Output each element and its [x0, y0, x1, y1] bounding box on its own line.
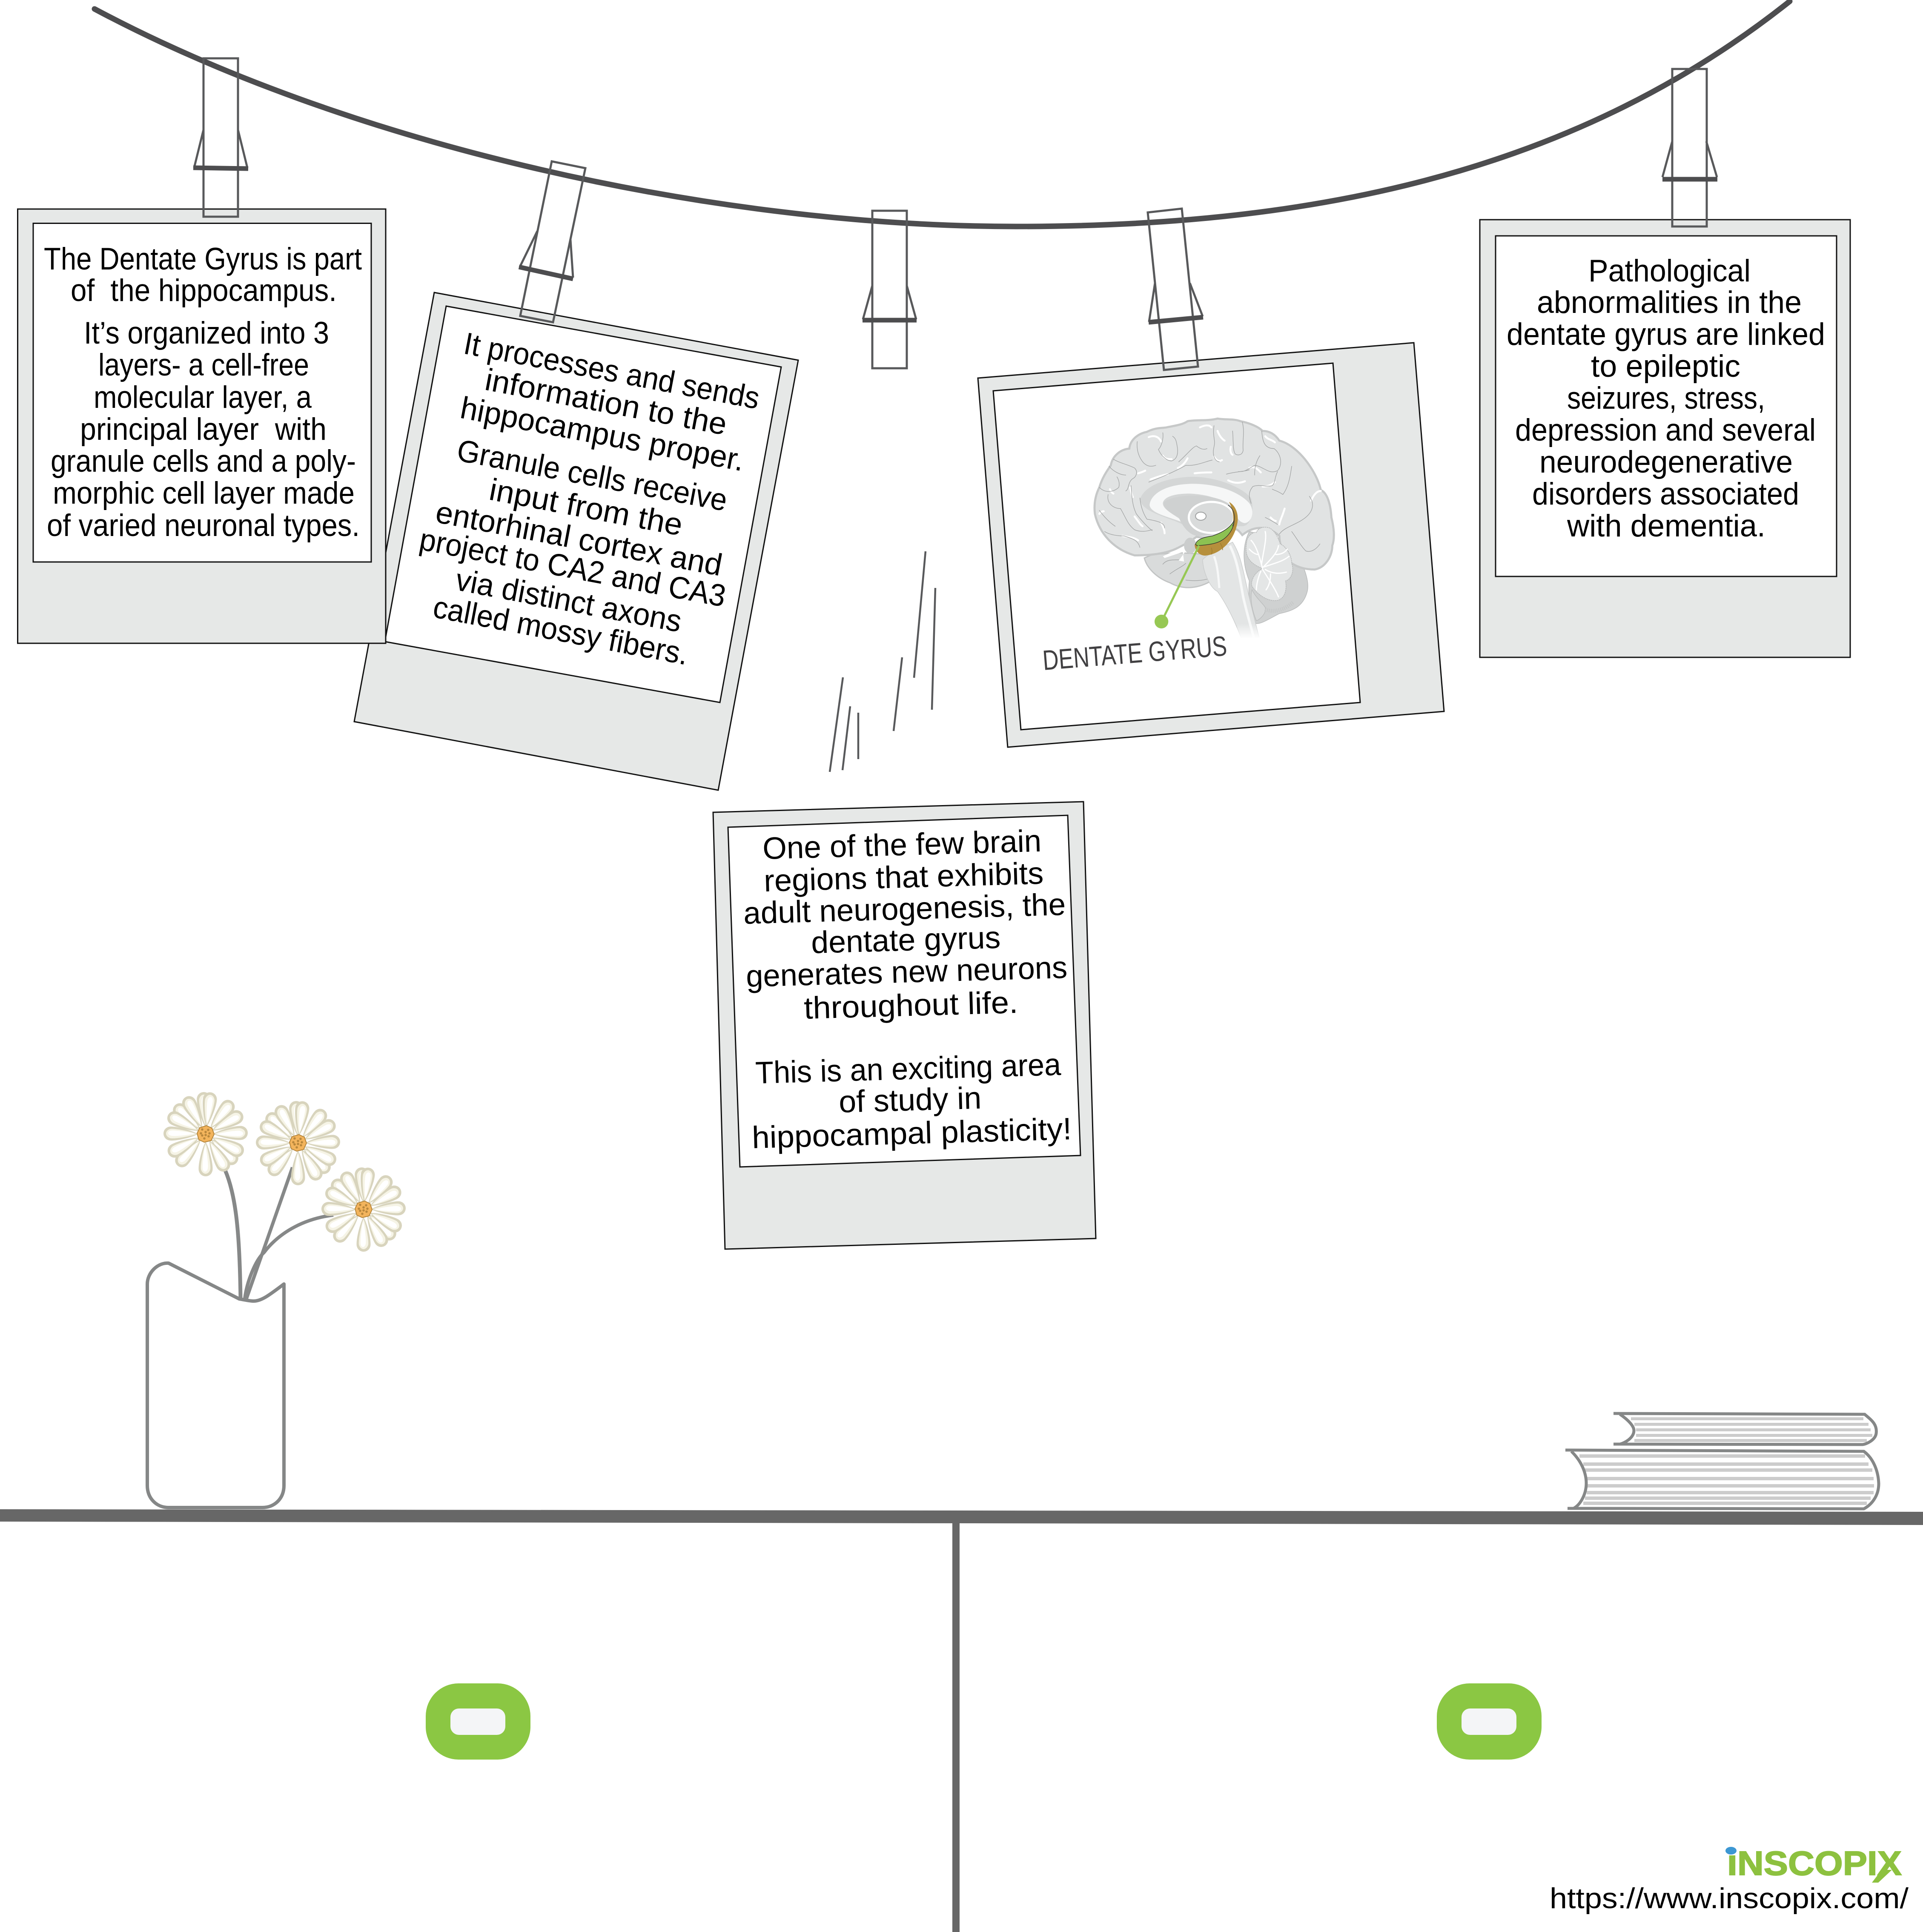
text: anatomy description: principal layer with: [80, 412, 327, 447]
text: neurogenesis description: [743, 824, 1072, 1155]
text: neurogenesis description: generates new neurons: [745, 950, 1068, 994]
shelf top: [0, 1509, 1923, 1525]
text: processing description: [417, 326, 762, 672]
panel: card 5 pathology: [1480, 220, 1850, 657]
icon: vase: [147, 1263, 284, 1508]
bottom book pages: [1579, 1454, 1874, 1505]
text: pathology description: abnormalities in the: [1537, 285, 1802, 320]
text: neurogenesis description: adult neurogenesis, the: [743, 887, 1066, 931]
text: anatomy description: The Dentate Gyrus is part: [44, 242, 362, 276]
text: anatomy description: granule cells and a poly-: [51, 444, 356, 479]
text: anatomy description: It’s organized into 3: [84, 316, 329, 350]
text: anatomy description: [44, 242, 362, 543]
bottom book cover: [1565, 1450, 1879, 1509]
icon: clothespin 5: [1662, 69, 1717, 226]
text: anatomy description: layers- a cell-free: [98, 348, 309, 382]
drawer handle left: [426, 1683, 530, 1760]
icon: clothespin 2: [519, 161, 585, 322]
icon: daisy 1: [163, 1092, 248, 1176]
text: pathology description: to epileptic: [1591, 349, 1740, 384]
text: neurogenesis description: regions that exhibits: [763, 856, 1044, 898]
text: neurogenesis description: dentate gyrus: [811, 920, 1001, 960]
text: anatomy description: of varied neuronal types.: [47, 508, 360, 543]
text: neurogenesis description: of study in: [838, 1081, 982, 1119]
panel: card 2 hippocampus processing: [354, 292, 798, 790]
icon: clothespin 1: [193, 58, 248, 217]
text: neurogenesis description: throughout life.: [803, 985, 1018, 1026]
text: neurogenesis description: This is an exciting area: [755, 1047, 1062, 1090]
clothesline rope: [95, 1, 1790, 226]
text: pathology description: disorders associated: [1532, 477, 1799, 511]
icon: daisy 2: [256, 1101, 341, 1185]
label: dentate gyrus: DENTATE GYRUS: [1041, 630, 1228, 676]
icon: stems: [225, 1167, 333, 1299]
panel: card 3 neurogenesis: [713, 802, 1096, 1249]
text: processing description: project to CA2 and CA3: [417, 522, 728, 613]
text: neurogenesis description: hippocampal plasticity!: [751, 1112, 1072, 1155]
text: pathology description: Pathological: [1588, 254, 1751, 288]
text: processing description: via distinct axons: [453, 562, 685, 639]
icon: brain sagittal section with dentate gyrus: [1095, 419, 1334, 643]
text: pathology description: neurodegenerative: [1539, 445, 1793, 479]
text: processing description: hippocampus proper.: [458, 390, 747, 478]
text: pathology description: seizures, stress,: [1567, 381, 1765, 416]
text: processing description: information to the: [482, 362, 730, 442]
text: pathology description: with dementia.: [1567, 509, 1765, 543]
icon: stacked books: [1565, 1413, 1879, 1509]
text: processing description: called mossy fibers.: [430, 590, 691, 672]
panel: card 4 brain illustration: [978, 343, 1444, 747]
logo: Inscopix: INSCOPIX: [1727, 1844, 1902, 1882]
text: processing description: Granule cells receive: [454, 433, 730, 518]
vase with daisies: [147, 1092, 406, 1508]
top book cover: [1613, 1413, 1876, 1445]
text: pathology description: [1507, 254, 1825, 543]
drawer handle right: [1437, 1683, 1542, 1760]
text: processing description: It processes and sends: [461, 326, 762, 416]
text: processing description: entorhinal cortex and: [433, 495, 725, 583]
text: pathology description: depression and several: [1515, 413, 1816, 447]
drawer divider: [952, 1520, 960, 1932]
website url: https://www.inscopix.com/: [1550, 1882, 1909, 1915]
text: pathology description: dentate gyrus are linked: [1507, 317, 1825, 352]
text: anatomy description: of the hippocampus.: [71, 273, 337, 308]
panel: card 1 dentate gyrus overview: [18, 209, 386, 643]
text: anatomy description: morphic cell layer made: [53, 476, 355, 510]
top book pages: [1631, 1417, 1872, 1442]
text: anatomy description: molecular layer, a: [94, 380, 312, 415]
motion lines: falling card: [830, 551, 935, 772]
icon: clothespin 3: [863, 211, 917, 368]
icon: daisy 3: [321, 1167, 406, 1252]
text: neurogenesis description: One of the few brain: [762, 824, 1042, 866]
text: processing description: input from the: [487, 472, 685, 542]
icon: clothespin 4: [1148, 209, 1203, 370]
